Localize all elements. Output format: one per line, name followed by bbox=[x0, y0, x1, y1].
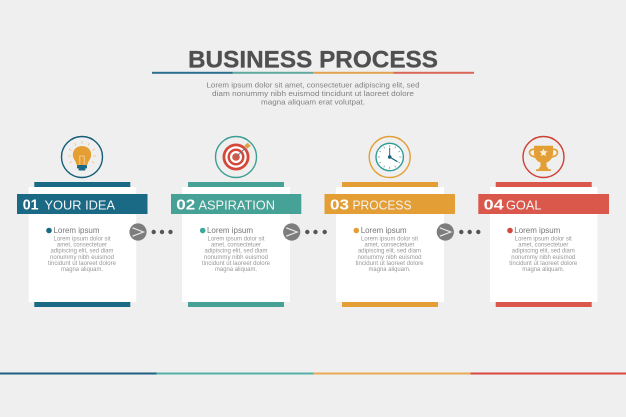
top bar bbox=[188, 182, 284, 187]
header band bbox=[324, 194, 455, 214]
step number: 01 bbox=[23, 198, 38, 214]
subtitle: Lorem ipsum dolor sit amet, consectetuer adipiscing elit, sed bbox=[206, 81, 420, 90]
item text: Lorem ipsum dolor sit bbox=[208, 236, 265, 242]
top bar bbox=[34, 182, 130, 187]
connector arrow 2 bbox=[283, 223, 327, 241]
item text: tincidunt ut laoreet dolore bbox=[509, 260, 578, 267]
bullet bbox=[354, 228, 359, 233]
icon: target bbox=[216, 136, 256, 178]
panel: aspiration bbox=[171, 136, 301, 307]
item text bbox=[356, 236, 424, 273]
icon: trophy bbox=[523, 136, 564, 178]
bullet bbox=[46, 228, 52, 233]
item heading: Lorem ipsum bbox=[207, 226, 253, 235]
item text: nonummy nibh euismod bbox=[358, 254, 422, 261]
top bar bbox=[496, 182, 592, 187]
item text: tincidunt ut laoreet dolore bbox=[356, 260, 424, 267]
icon: clock bbox=[369, 136, 410, 178]
item text: tincidunt ut laoreet dolore bbox=[48, 260, 117, 267]
item text: magna aliquam. bbox=[522, 266, 565, 273]
card bbox=[29, 187, 136, 302]
step number: 02 bbox=[176, 198, 195, 214]
icon: light bulb bbox=[62, 136, 102, 178]
item text: amet, consectetuer bbox=[518, 242, 568, 249]
bullet bbox=[507, 228, 513, 233]
item text: amet, consectetuer bbox=[57, 242, 107, 249]
item heading: Lorem ipsum bbox=[514, 226, 561, 235]
bullet bbox=[200, 228, 206, 233]
item text: adipiscing elit, sed diam bbox=[512, 248, 575, 255]
item text: adipiscing elit, sed diam bbox=[204, 248, 268, 255]
header band bbox=[478, 194, 609, 214]
connector arrow 1 bbox=[129, 223, 173, 241]
title underline bbox=[152, 72, 474, 74]
item text: nonummy nibh euismod bbox=[204, 254, 268, 261]
item text: magna aliquam. bbox=[61, 266, 103, 273]
panel: your idea bbox=[17, 136, 148, 307]
step label: PROCESS bbox=[352, 198, 412, 212]
subtitle: diam nonummy nibh euismod tincidunt ut laoreet dolore bbox=[212, 89, 414, 98]
panel: process bbox=[324, 136, 455, 307]
header band bbox=[17, 194, 148, 214]
item heading: Lorem ipsum bbox=[361, 226, 407, 235]
subtitle bbox=[206, 81, 420, 106]
item text: adipiscing elit, sed diam bbox=[50, 248, 114, 255]
title: BUSINESS PROCESS bbox=[188, 46, 438, 73]
item text: magna aliquam. bbox=[368, 266, 411, 273]
item heading: Lorem ipsum bbox=[54, 226, 100, 235]
step label: GOAL bbox=[506, 198, 542, 212]
item text: amet, consectetuer bbox=[364, 242, 414, 249]
item text: Lorem ipsum dolor sit bbox=[361, 236, 418, 242]
item text: adipiscing elit, sed diam bbox=[358, 248, 421, 255]
item text: magna aliquam. bbox=[215, 266, 257, 273]
header band bbox=[171, 194, 301, 214]
connector arrow 3 bbox=[437, 223, 480, 241]
card bbox=[336, 187, 444, 302]
bottom bar bbox=[188, 302, 284, 307]
item text: nonummy nibh euismod bbox=[50, 254, 114, 261]
top bar bbox=[342, 182, 438, 187]
card bbox=[182, 187, 290, 302]
step label: YOUR IDEA bbox=[44, 198, 115, 212]
subtitle: magna aliquam erat volutpat. bbox=[261, 98, 365, 106]
step label: ASPIRATION bbox=[198, 198, 275, 212]
step number: 04 bbox=[484, 198, 504, 214]
item text bbox=[202, 236, 271, 273]
step number: 03 bbox=[330, 198, 349, 214]
item text bbox=[48, 236, 117, 273]
card bbox=[490, 187, 598, 302]
item text: tincidunt ut laoreet dolore bbox=[202, 260, 271, 267]
bottom bar bbox=[342, 302, 438, 307]
bottom colour rule bbox=[0, 372, 626, 374]
item text: nonummy nibh euismod bbox=[511, 254, 575, 261]
item text: amet, consectetuer bbox=[211, 242, 261, 249]
item text: Lorem ipsum dolor sit bbox=[515, 236, 572, 242]
item text: Lorem ipsum dolor sit bbox=[54, 236, 111, 242]
item text bbox=[509, 236, 578, 273]
bottom bar bbox=[34, 302, 130, 307]
bottom bar bbox=[496, 302, 592, 307]
panel: goal bbox=[478, 136, 609, 307]
